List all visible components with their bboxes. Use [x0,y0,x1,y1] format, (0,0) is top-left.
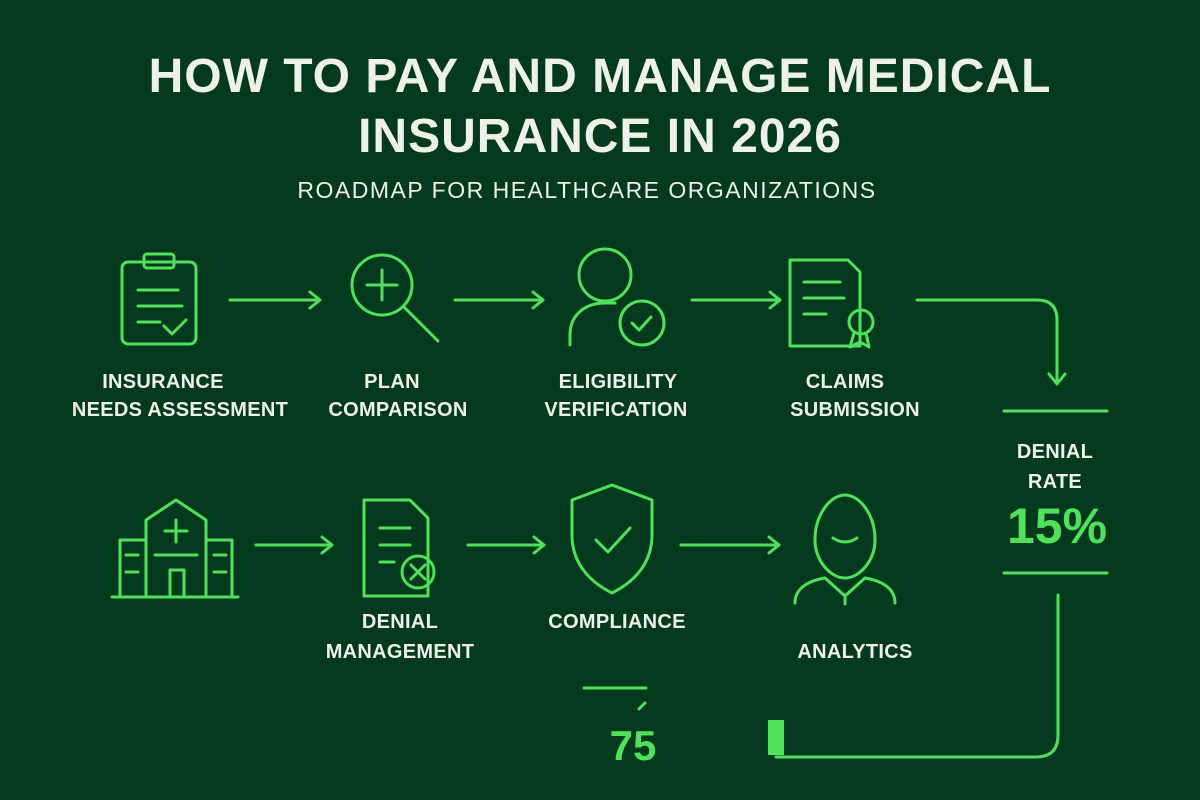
icon: person avatar [795,495,895,604]
labels: NEEDS ASSESSMENT [72,399,288,421]
labels: DENIAL [1017,441,1093,463]
bottom connector [584,595,1058,757]
subtitle: ROADMAP FOR HEALTHCARE ORGANIZATIONS [297,177,877,203]
stat: 75: 75 [610,722,656,769]
labels: ANALYTICS [797,641,913,663]
denial rate lines [1004,411,1107,573]
title: HOW TO PAY AND MANAGE MEDICAL [149,50,1051,103]
stat: 15%: 15% [1007,498,1107,554]
icon: hospital [112,500,238,597]
title: INSURANCE IN 2026 [358,110,842,163]
icon: clipboard [122,254,196,344]
labels: PLAN [364,371,420,393]
labels: VERIFICATION [544,399,688,421]
icon: certificate [790,260,873,347]
connector end block [768,720,784,755]
labels: SUBMISSION [790,399,920,421]
labels [72,371,1093,663]
icon: magnifier plus [352,255,438,341]
labels: RATE [1028,471,1082,493]
icon: document x [364,500,434,596]
labels: DENIAL [362,611,438,633]
arrows row1 [230,292,1065,384]
icon: shield [572,485,652,593]
labels: ELIGIBILITY [559,371,678,393]
labels: INSURANCE [102,371,224,393]
icon: person check [570,249,664,345]
labels: CLAIMS [806,371,884,393]
labels: MANAGEMENT [326,641,474,663]
labels: COMPARISON [328,399,468,421]
title [149,50,1051,163]
arrows row2 [256,537,779,553]
labels: COMPLIANCE [548,611,686,633]
